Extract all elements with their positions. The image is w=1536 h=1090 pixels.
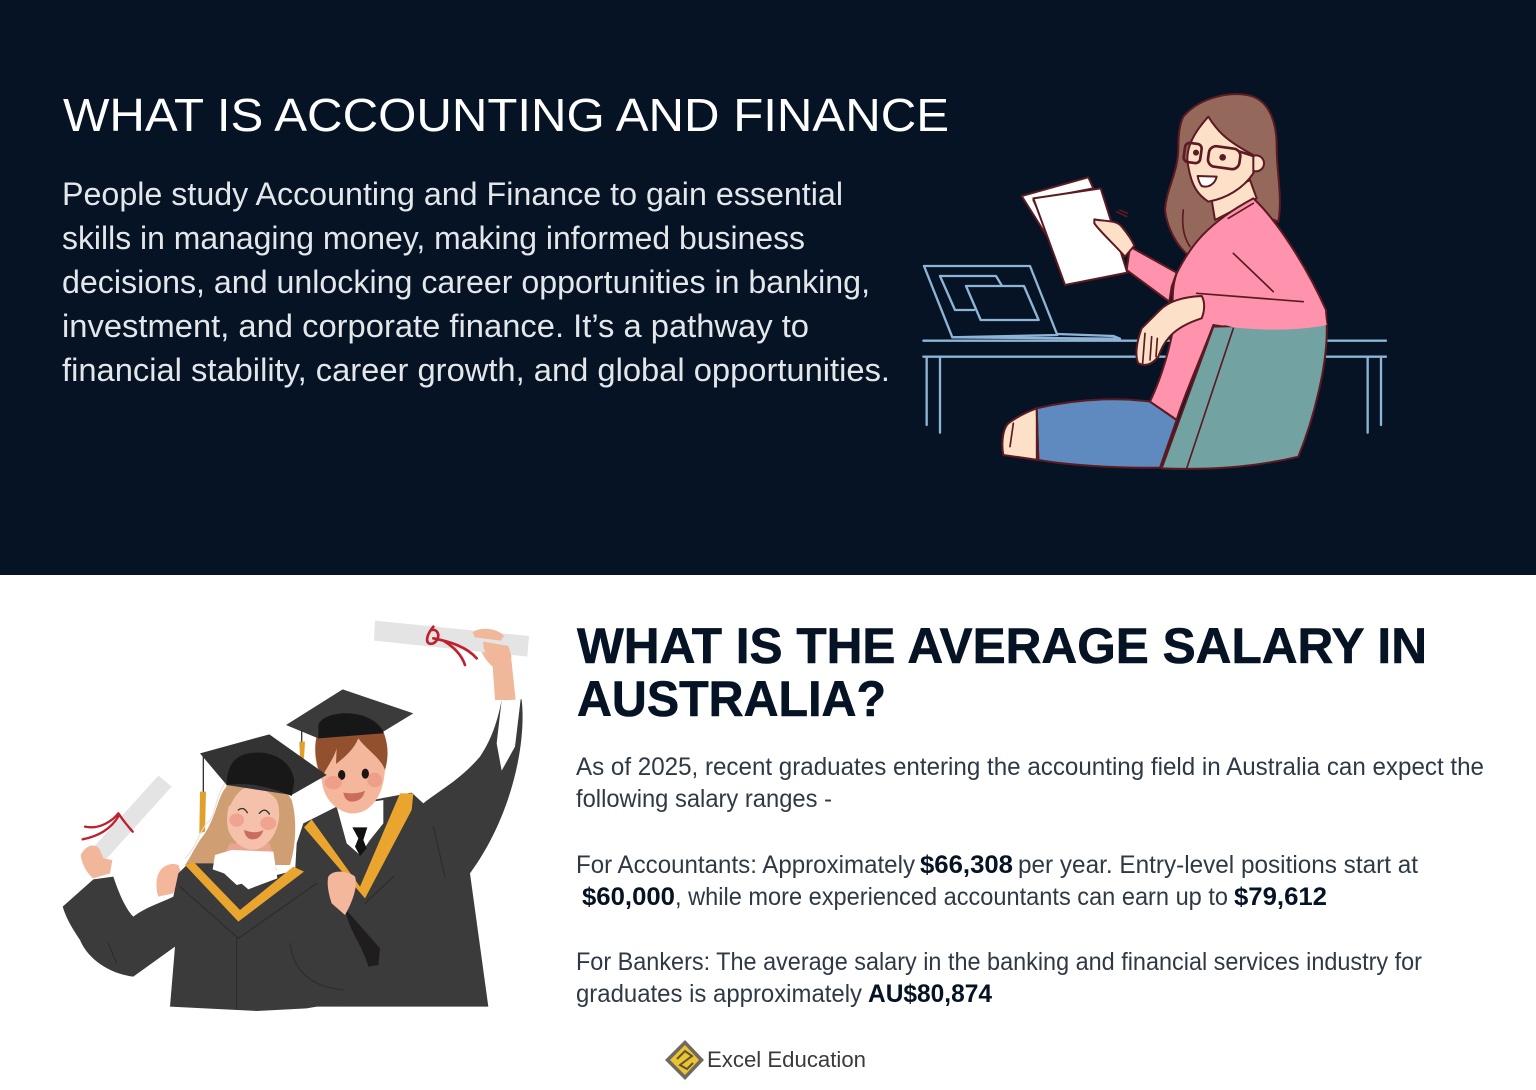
illustration: woman at desk holding papers xyxy=(923,94,1386,469)
text block: introduction xyxy=(576,753,1484,813)
icon: gold diamond xyxy=(665,1040,704,1080)
text block: accountants salary: $79,612 xyxy=(1234,883,1327,911)
text block: why people study accounting and finance: financial stability, career growth, and global opportunities. xyxy=(62,352,890,388)
text block: introduction: following salary ranges - xyxy=(576,785,832,813)
text block: bankers salary xyxy=(576,948,1422,1008)
text block: accountants salary xyxy=(576,851,1418,911)
text block: introduction: As of 2025, recent graduates entering the accounting field in Australia can expect the xyxy=(576,753,1484,781)
illustration: two graduates with diplomas xyxy=(63,621,529,1011)
panel: average salary in australia xyxy=(63,618,1484,1080)
logo: excel education xyxy=(665,1040,866,1080)
heading: average salary: WHAT IS THE AVERAGE SALARY IN xyxy=(577,618,1427,674)
panel: what is accounting and finance xyxy=(0,0,1536,575)
heading: average salary: AUSTRALIA? xyxy=(577,671,886,727)
heading: average salary xyxy=(577,618,1427,727)
text block: bankers salary: AU$80,874 xyxy=(868,980,992,1008)
text block: why people study accounting and finance: skills in managing money, making informed business xyxy=(62,220,805,256)
text block: accountants salary: For Accountants: Approximately xyxy=(576,851,915,879)
text block: accountants salary: , while more experienced accountants can earn up to xyxy=(675,883,1228,911)
text block: why people study accounting and finance: People study Accounting and Finance to gain essential xyxy=(62,176,843,212)
heading: what is accounting and finance: WHAT IS ACCOUNTING AND FINANCE xyxy=(63,89,949,141)
text block: why people study accounting and finance: investment, and corporate finance. It’s a pathway to xyxy=(62,308,809,344)
text block: bankers salary: For Bankers: The average salary in the banking and financial services industry for xyxy=(576,948,1422,976)
text block: accountants salary: per year. Entry-level positions start at xyxy=(1018,851,1418,879)
text block: accountants salary: $66,308 xyxy=(920,851,1013,879)
text block: accountants salary: $60,000 xyxy=(582,883,675,911)
text block: why people study accounting and finance xyxy=(62,176,890,388)
text block: why people study accounting and finance: decisions, and unlocking career opportunities in banking, xyxy=(62,264,870,300)
text block: bankers salary: graduates is approximately xyxy=(576,980,862,1008)
wordmark: Excel Education xyxy=(707,1047,866,1072)
